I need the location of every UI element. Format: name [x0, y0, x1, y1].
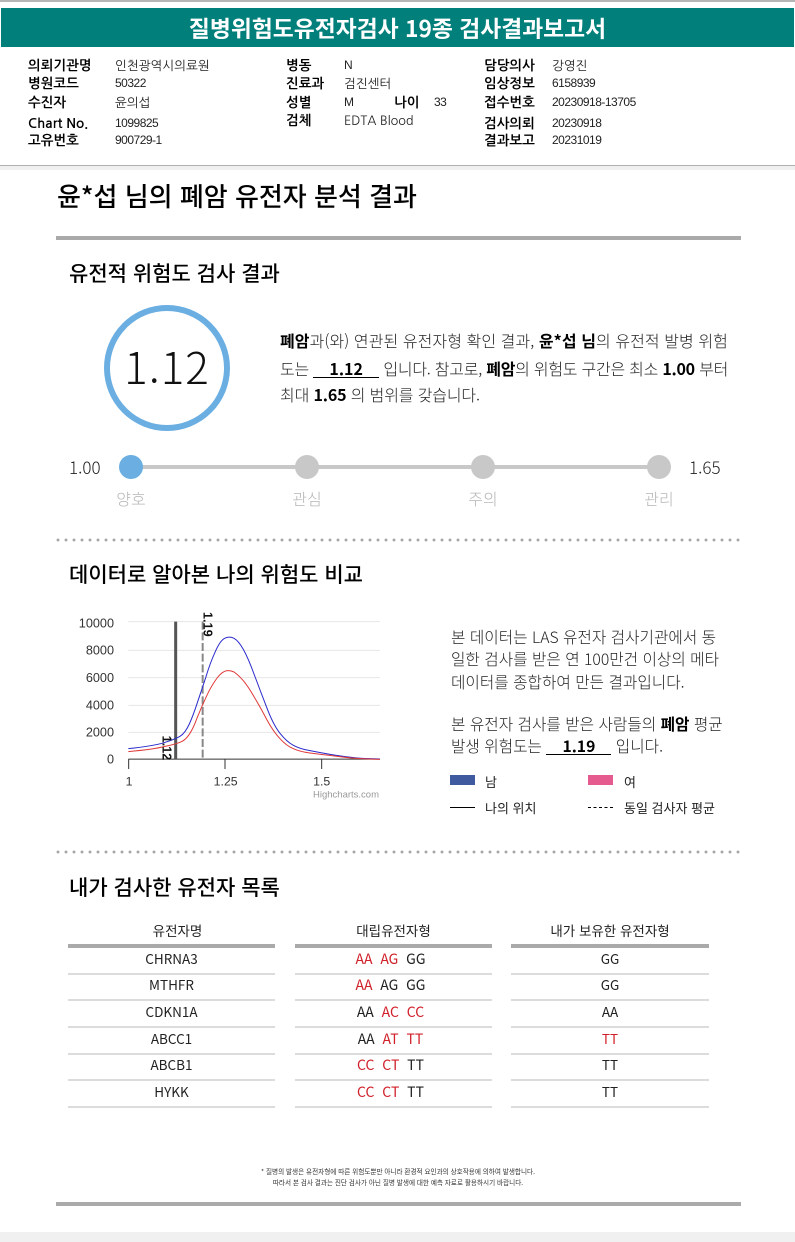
- patient information: M: [344, 95, 354, 109]
- header bottom rule: [0, 165, 795, 170]
- patient information: 20231019: [552, 133, 601, 147]
- section heading: genetic risk: 유전적 위험도 검사 결과: [69, 258, 280, 288]
- gene table: TT: [602, 1081, 618, 1101]
- column head: gene name: 유전자명: [153, 920, 202, 940]
- patient information: 윤의섭: [115, 96, 151, 109]
- row: ABCB1: ABCB1: [150, 1054, 193, 1074]
- patient information: 고유번호: [28, 135, 79, 148]
- marker: 관심: [295, 455, 319, 479]
- patient information: 접수번호: [484, 97, 535, 110]
- legend: 남: [485, 772, 497, 791]
- gene table: GG: [601, 948, 619, 968]
- y axis labels: 6000: [86, 671, 114, 685]
- patient information: 강영진: [552, 59, 588, 72]
- marker value: 1.12: 1.12: [160, 736, 174, 760]
- marker value: 1.19: 1.19: [201, 612, 215, 637]
- risk score circle: 1.12: [124, 333, 210, 397]
- patient information: 1099825: [115, 116, 158, 130]
- legend: my position: [450, 807, 475, 808]
- patient information: 나이: [394, 97, 419, 110]
- patient information: 20230918-13705: [552, 95, 636, 109]
- patient information: 검체: [286, 115, 311, 128]
- distribution chart: [79, 612, 380, 801]
- gene table: GG: [601, 974, 619, 994]
- patient information: 병원코드: [28, 78, 79, 91]
- report header: [0, 8, 795, 170]
- risk explanation text: 도는 입니다. 참고로, 폐암의 위험도 구간은 최소 1.00 부터: [280, 356, 728, 380]
- x axis labels: 1: [126, 775, 133, 789]
- comparison explanation text: 본 유전자 검사를 받은 사람들의 폐암 평균: [451, 712, 723, 735]
- curve: male: [128, 637, 380, 759]
- patient information: [28, 58, 636, 148]
- legend: 나의 위치: [485, 798, 536, 817]
- patient information: 결과보고: [484, 135, 535, 148]
- page bottom band: [0, 1232, 795, 1242]
- footnote: [261, 1166, 535, 1186]
- title banner: [1, 8, 794, 47]
- patient information: 검사의뢰: [484, 118, 535, 131]
- marker line: average: [200, 622, 206, 759]
- patient information: 6158939: [552, 76, 595, 90]
- scale minimum: 1.00: [69, 454, 101, 479]
- gene table: TT: [602, 1054, 618, 1074]
- row: MTHFR: MTHFR: [149, 974, 194, 994]
- patient information: 담당의사: [484, 60, 535, 73]
- column head: my genotype: 내가 보유한 유전자형: [550, 920, 670, 940]
- patient information: 의뢰기관명: [28, 60, 91, 73]
- patient information: 50322: [115, 76, 146, 90]
- patient information: 임상정보: [484, 78, 535, 91]
- comparison explanation text: 본 데이터는 LAS 유전자 검사기관에서 동: [451, 625, 716, 648]
- chart credit: Highcharts.com: [313, 790, 379, 801]
- patient information: 20230918: [552, 116, 601, 130]
- footnote: * 질병의 발생은 유전자형에 따른 위험도뿐만 아니라 환경적 요인과의 상호작용에 의하여 발생합니다.: [261, 1166, 535, 1176]
- x axis labels: [126, 775, 330, 789]
- y axis labels: 2000: [86, 726, 114, 740]
- main title: 윤*섭 님의 폐암 유전자 분석 결과: [57, 177, 417, 214]
- comparison explanation text: 1.19: [562, 734, 595, 757]
- scale track: [131, 465, 659, 469]
- legend: average: [588, 807, 613, 808]
- marker: 양호: [119, 455, 143, 479]
- risk explanation text: 폐암과(와) 연관된 유전자형 확인 결과, 윤*섭 님의 유전적 발병 위험: [280, 328, 728, 352]
- gene table: TT: [602, 1028, 618, 1048]
- patient information: Chart No.: [28, 118, 88, 131]
- comparison explanation text: 발생 위험도는 입니다.: [451, 734, 663, 757]
- y axis labels: 10000: [79, 617, 114, 631]
- x axis labels: 1.25: [214, 775, 238, 789]
- label: 관심: 관심: [292, 486, 322, 510]
- x axis: [128, 759, 380, 769]
- risk explanation text: [280, 328, 728, 406]
- scale maximum: 1.65: [689, 454, 721, 479]
- gene table: AA AT TT: [358, 1029, 423, 1049]
- patient information: 성별: [286, 97, 311, 110]
- label: 관리: 관리: [644, 486, 674, 510]
- patient information: 검진센터: [344, 77, 391, 90]
- legend: female: [588, 775, 613, 785]
- label: 주의: 주의: [468, 486, 498, 510]
- y axis labels: 4000: [86, 699, 114, 713]
- patient information: 900729-1: [115, 133, 162, 147]
- gene table: AA AG GG: [356, 975, 425, 995]
- risk score circle: [104, 305, 230, 431]
- y axis labels: [79, 617, 114, 767]
- gene table: AA AC CC: [357, 1002, 424, 1022]
- section heading: gene list: 내가 검사한 유전자 목록: [69, 872, 280, 902]
- page top band: [0, 0, 795, 2]
- legend: 여: [624, 772, 636, 791]
- risk explanation text: 1.12: [329, 356, 363, 380]
- column head: alleles: 대립유전자형: [356, 920, 431, 940]
- gene table: CC CT TT: [357, 1055, 424, 1075]
- gene table: AA: [602, 1001, 618, 1021]
- gene table: CC CT TT: [357, 1082, 424, 1102]
- patient information: N: [344, 58, 352, 72]
- patient information: 수진자: [28, 97, 66, 110]
- row: ABCC1: ABCC1: [151, 1028, 192, 1048]
- y axis labels: 0: [107, 753, 114, 767]
- curve: female: [128, 671, 380, 759]
- gene table: AA AG GG: [356, 949, 425, 969]
- row: CDKN1A: CDKN1A: [145, 1001, 198, 1021]
- gene table: [68, 920, 709, 1108]
- title banner: 질병위험도유전자검사 19종 검사결과보고서: [189, 11, 606, 44]
- row: HYKK: HYKK: [154, 1081, 189, 1101]
- patient information: 진료과: [286, 78, 324, 91]
- legend: male: [450, 775, 475, 785]
- risk explanation text: 최대 1.65 의 범위를 갖습니다.: [280, 382, 480, 406]
- y axis labels: 8000: [86, 644, 114, 658]
- patient information: 인천광역시의료원: [115, 59, 210, 72]
- patient information: 병동: [286, 60, 311, 73]
- row: CHRNA3: CHRNA3: [145, 948, 198, 968]
- marker: 관리: [647, 455, 671, 479]
- patient information: 33: [434, 95, 446, 109]
- patient information: EDTA Blood: [344, 114, 414, 127]
- section heading: comparison: 데이터로 알아본 나의 위험도 비교: [69, 559, 363, 589]
- footnote: 따라서 본 검사 결과는 진단 검사가 아닌 질병 발생에 대한 예측 자료로 활용하시기 바랍니다.: [273, 1176, 523, 1186]
- comparison explanation text: 일한 검사를 받은 연 100만건 이상의 메타: [451, 647, 719, 670]
- x axis labels: 1.5: [313, 775, 330, 789]
- risk scale: [69, 454, 721, 510]
- label: 양호: 양호: [116, 486, 146, 510]
- marker: 주의: [471, 455, 495, 479]
- comparison explanation text: [451, 625, 723, 757]
- legend: 동일 검사자 평균: [624, 798, 715, 817]
- comparison explanation text: 데이터를 종합하여 만든 결과입니다.: [451, 670, 685, 693]
- legend: [450, 772, 715, 817]
- marker line: my position: [171, 622, 180, 759]
